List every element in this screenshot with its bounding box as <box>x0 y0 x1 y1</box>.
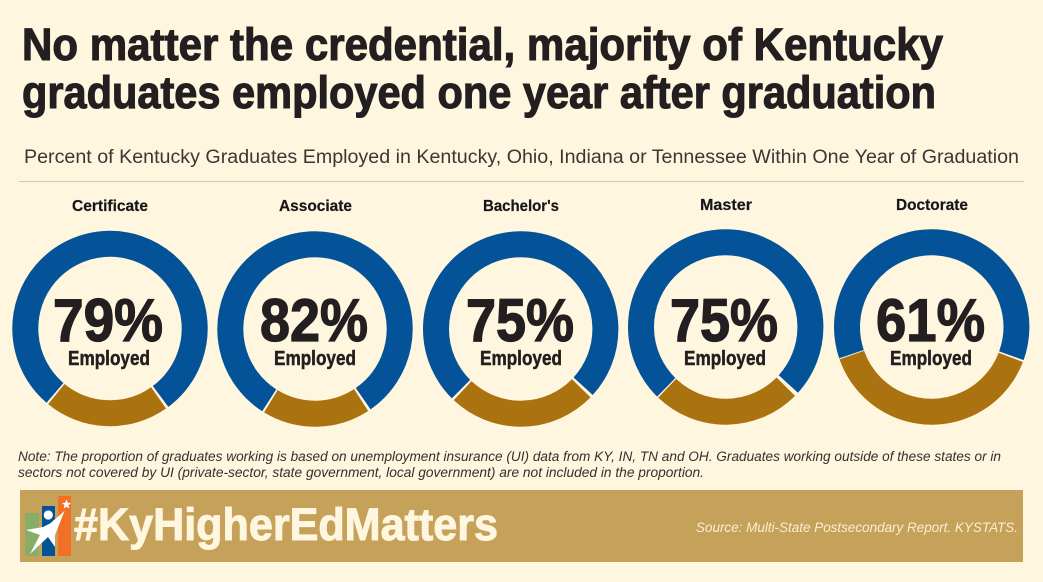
note: sectors not covered by UI (private-sector, state government, local government) are not included in the proportion. <box>18 465 704 480</box>
icon: logo <box>25 496 71 556</box>
value: 79% employed: 79% <box>53 287 163 354</box>
value: 82% employed: Employed <box>274 348 356 370</box>
panel: bachelor's <box>401 198 640 449</box>
label: associate: Associate <box>279 198 352 215</box>
title <box>22 19 943 118</box>
value: 75% employed: Employed <box>684 348 766 370</box>
panel: certificate <box>0 198 229 448</box>
title: No matter the credential, majority of Kentucky <box>22 19 943 70</box>
panel: master <box>606 197 845 447</box>
label: doctorate: Doctorate <box>896 197 968 214</box>
value: 79% employed: Employed <box>68 348 150 370</box>
title: graduates employed one year after graduation <box>22 67 936 118</box>
note: Note: The proportion of graduates working is based on unemployment insurance (UI) data from KY, IN, TN and OH. Graduates working outside of these states or in <box>18 449 1001 464</box>
hashtag: #KyHigherEdMatters <box>74 499 498 550</box>
value: 61% employed: Employed <box>890 348 972 370</box>
donut chart: master 75% <box>606 207 845 447</box>
value: 75% employed: 75% <box>466 287 574 354</box>
value: 82% employed: 82% <box>260 287 368 354</box>
note <box>18 449 1001 480</box>
source: Source: Multi-State Postsecondary Report. KYSTATS. <box>696 520 1018 535</box>
donut chart: certificate 79% <box>0 209 229 448</box>
donut chart: associate 82% <box>198 212 432 446</box>
panel: associate <box>198 198 432 446</box>
footer banner <box>20 490 1023 562</box>
panel: doctorate <box>822 197 1041 436</box>
label: master: Master <box>700 197 752 214</box>
value: 75% employed: Employed <box>480 348 562 370</box>
donut chart: bachelor's 75% <box>401 209 640 449</box>
label: certificate: Certificate <box>72 198 148 215</box>
value: 61% employed: 61% <box>876 287 985 354</box>
donut chart: doctorate 61% <box>822 218 1041 436</box>
subtitle: Percent of Kentucky Graduates Employed in Kentucky, Ohio, Indiana or Tennessee Within One Year of Graduation <box>24 147 1019 168</box>
value: 75% employed: 75% <box>670 287 778 354</box>
label: bachelor's: Bachelor's <box>483 198 559 215</box>
